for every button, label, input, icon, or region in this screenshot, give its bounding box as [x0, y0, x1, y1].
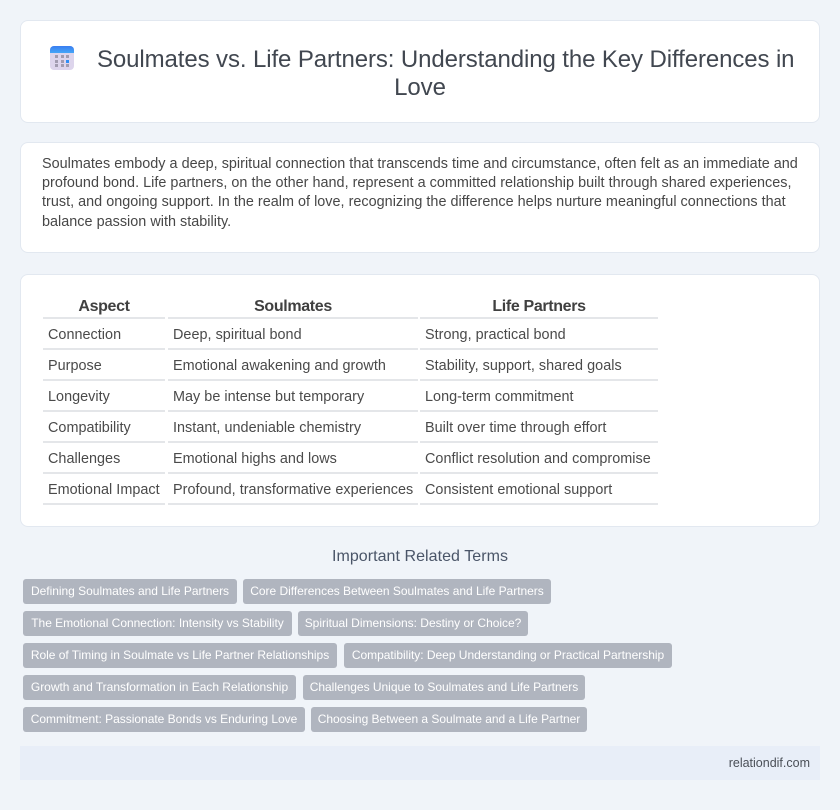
related terms tags: The Emotional Connection: Intensity vs Stability [31, 616, 284, 630]
comparison table: Built over time through effort [425, 420, 606, 436]
related terms tags: Core Differences Between Soulmates and Life Partners [250, 584, 544, 598]
intro paragraph: trust, and ongoing support. In the realm of love, recognizing the difference helps nurture meaningful connections that [42, 194, 786, 210]
related terms tags: Challenges Unique to Soulmates and Life Partners [310, 680, 578, 694]
comparison table: Long-term commitment [425, 389, 574, 405]
related terms tags [23, 579, 672, 732]
title: Love [394, 74, 446, 101]
related terms tags: Choosing Between a Soulmate and a Life Partner [318, 712, 580, 726]
related terms tags: Commitment: Passionate Bonds vs Enduring Love [31, 712, 297, 726]
header card [20, 20, 820, 123]
related terms tags: Role of Timing in Soulmate vs Life Partner Relationships [31, 648, 329, 662]
title: Soulmates vs. Life Partners: Understanding the Key Differences in [97, 46, 794, 73]
comparison table: Emotional Impact [48, 482, 160, 498]
comparison table: Aspect [78, 298, 130, 315]
comparison table: Purpose [48, 358, 102, 374]
comparison table: Connection [48, 327, 121, 343]
comparison table: Deep, spiritual bond [173, 327, 302, 343]
related terms heading: Important Related Terms [332, 548, 508, 565]
title [97, 46, 794, 101]
comparison table: Soulmates [254, 298, 332, 315]
related terms tags: Growth and Transformation in Each Relationship [31, 680, 288, 694]
footer bar [20, 746, 820, 780]
related terms tags: Compatibility: Deep Understanding or Practical Partnership [352, 648, 664, 662]
comparison table [43, 298, 658, 505]
comparison table: Strong, practical bond [425, 327, 566, 343]
comparison table: Longevity [48, 389, 110, 405]
intro paragraph: balance passion with stability. [42, 214, 231, 230]
icon: calendar [50, 46, 74, 70]
related terms tags: Defining Soulmates and Life Partners [31, 584, 229, 598]
intro card [20, 142, 820, 253]
intro paragraph: profound bond. Life partners, on the other hand, represent a committed relationship built through shared experiences, [42, 175, 792, 191]
comparison table: May be intense but temporary [173, 389, 364, 405]
intro paragraph: Soulmates embody a deep, spiritual connection that transcends time and circumstance, often felt as an immediate and [42, 156, 798, 172]
comparison table: Life Partners [492, 298, 586, 315]
comparison table: Compatibility [48, 420, 131, 436]
comparison table card [20, 274, 820, 527]
comparison table: Challenges [48, 451, 120, 467]
related terms tags: Spiritual Dimensions: Destiny or Choice? [305, 616, 521, 630]
comparison table: Consistent emotional support [425, 482, 612, 498]
comparison table: Instant, undeniable chemistry [173, 420, 361, 436]
footer source text: relationdif.com [729, 756, 810, 770]
comparison table: Emotional awakening and growth [173, 358, 386, 374]
comparison table: Profound, transformative experiences [173, 482, 413, 498]
comparison table: Conflict resolution and compromise [425, 451, 651, 467]
comparison table: Emotional highs and lows [173, 451, 337, 467]
comparison table: Stability, support, shared goals [425, 358, 622, 374]
intro paragraph [42, 156, 798, 230]
